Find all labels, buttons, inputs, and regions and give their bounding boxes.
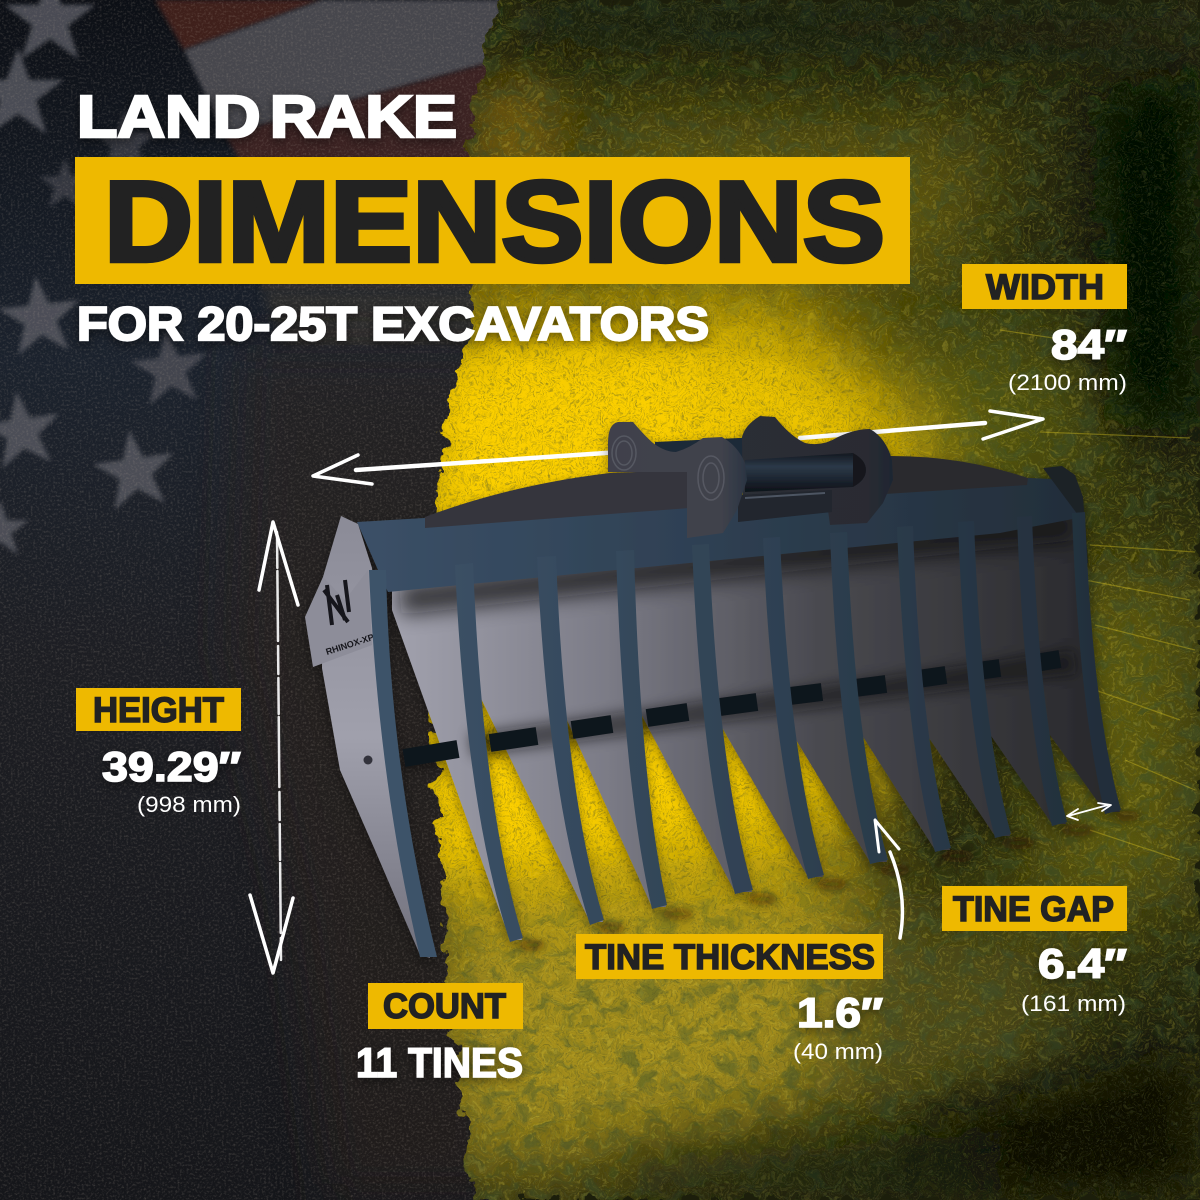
subheading: FOR 20-25T EXCAVATORS: [77, 297, 709, 350]
callout: tine gap: (161 mm): [1021, 991, 1126, 1016]
tines: [455, 512, 1121, 942]
callout: count: [356, 983, 523, 1086]
plate shading: [400, 525, 1075, 745]
product: land rake: [305, 416, 1142, 958]
banner: dimensions: DIMENSIONS: [104, 159, 885, 286]
callout: width: (2100 mm): [1008, 370, 1127, 395]
ground shadows: [518, 812, 1142, 950]
arrow: tine gap: [1067, 803, 1111, 820]
top wedge plates: [425, 470, 690, 528]
callout: width: 84″: [1051, 321, 1127, 368]
callout: width: [962, 264, 1127, 395]
side plate: [305, 516, 430, 958]
logo plate: [305, 570, 375, 667]
scratches: [1000, 330, 1195, 860]
front ear: [608, 422, 747, 538]
callout: count: 11 TINES: [356, 1039, 523, 1086]
callout: height: [76, 688, 241, 817]
yellow side base: [510, 0, 1200, 1200]
callout: width: WIDTH: [986, 268, 1104, 307]
callout: tine thickness: [576, 934, 883, 1064]
callout: tine gap: TINE GAP: [953, 890, 1114, 929]
right end plate: [1043, 466, 1088, 565]
title: [75, 84, 910, 350]
heading: land rake: LAND RAKE: [77, 84, 457, 150]
rear ear: [742, 416, 893, 525]
yellow grunge side: [420, 0, 1200, 1200]
main beam: [357, 478, 1078, 592]
rear pin: [655, 437, 760, 460]
main shaft: [745, 453, 853, 492]
callout: height: HEIGHT: [93, 691, 224, 730]
callout: tine thickness: 1.6″: [797, 989, 883, 1036]
arrow: width: [313, 411, 1043, 484]
dark flag side: [0, 0, 700, 1200]
lower bar: [738, 490, 832, 522]
callout: tine thickness: TINE THICKNESS: [585, 938, 875, 977]
end tine: [369, 570, 437, 957]
plates: [392, 513, 1120, 940]
callout: height: (998 mm): [137, 792, 241, 817]
bosses: [612, 436, 724, 500]
logo plate: RHINOX-XP: [325, 632, 375, 657]
callout: height: 39.29″: [102, 743, 241, 790]
callout: count: COUNT: [383, 987, 506, 1026]
callout: tine thickness: (40 mm): [793, 1039, 883, 1064]
hitch mount: [608, 416, 893, 538]
callout: tine gap: 6.4″: [1038, 940, 1127, 987]
rod segments: [404, 659, 1060, 758]
arrow: tine thickness: [875, 820, 902, 938]
arrow: height: [250, 522, 298, 973]
callout: tine gap: [942, 886, 1127, 1016]
